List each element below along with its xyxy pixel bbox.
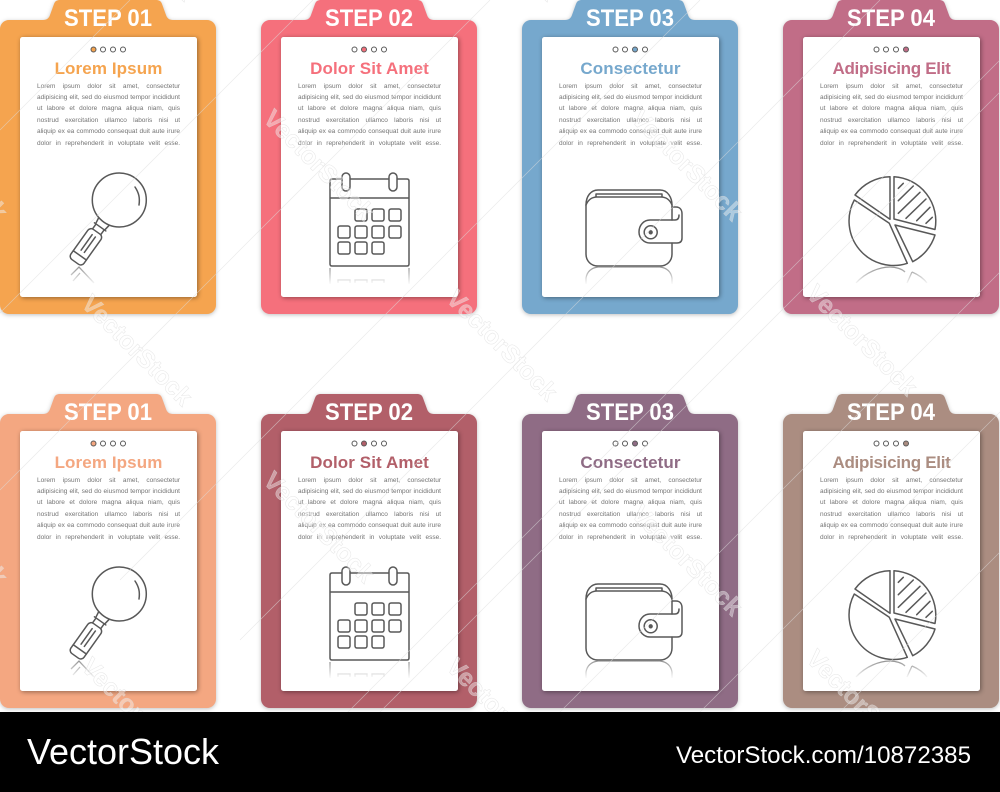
- card title: Dolor Sit Amet: [310, 453, 429, 472]
- card title: Adipisicing Elit: [832, 453, 950, 472]
- step label: STEP 02: [325, 399, 413, 426]
- body text: [820, 476, 963, 541]
- card title: Lorem Ipsum: [55, 453, 162, 472]
- step label: STEP 03: [586, 5, 674, 32]
- footer url: VectorStock.com/10872385: [676, 742, 971, 769]
- body text: aliquip ex ea commodo consequat duit aute irure: [559, 128, 702, 135]
- watermark overlay: VectorStock: [626, 499, 748, 621]
- body text: adipisicing elit, sed do eiusmod tempor incididunt: [37, 94, 180, 101]
- body text: aliquip ex ea commodo consequat duit aute irure: [37, 522, 180, 529]
- body text: ut labore et dolore magna aliqua niam, quis: [298, 105, 441, 112]
- body text: dolor in reprehenderit in voluptate velit esse.: [820, 140, 963, 147]
- body text: ut labore et dolore magna aliqua niam, quis: [820, 499, 963, 506]
- body text: [37, 476, 180, 541]
- card title: Adipisicing Elit: [832, 59, 950, 78]
- body text: dolor in reprehenderit in voluptate velit esse.: [559, 140, 702, 147]
- body text: Lorem ipsum dolor sit amet, consectetur: [820, 82, 963, 90]
- body text: ut labore et dolore magna aliqua niam, quis: [37, 499, 180, 506]
- card: step 02 red: [258, 0, 480, 318]
- body text: Lorem ipsum dolor sit amet, consectetur: [820, 476, 963, 484]
- body text: [820, 82, 963, 147]
- body text: nostrud exercitation ullamco laboris nisi ut: [820, 511, 963, 518]
- body text: [559, 476, 702, 541]
- body text: adipisicing elit, sed do eiusmod tempor incididunt: [820, 94, 963, 101]
- card: step 03 blue: [520, 0, 740, 318]
- body text: adipisicing elit, sed do eiusmod tempor incididunt: [37, 488, 180, 495]
- body text: ut labore et dolore magna aliqua niam, quis: [559, 499, 702, 506]
- body text: nostrud exercitation ullamco laboris nisi ut: [298, 117, 441, 124]
- card title: Lorem Ipsum: [55, 59, 162, 78]
- body text: aliquip ex ea commodo consequat duit aute irure: [298, 128, 441, 135]
- body text: dolor in reprehenderit in voluptate velit esse.: [37, 140, 180, 147]
- body text: ut labore et dolore magna aliqua niam, quis: [820, 105, 963, 112]
- step label: STEP 04: [847, 5, 935, 32]
- body text: dolor in reprehenderit in voluptate velit esse.: [298, 140, 441, 147]
- step label: STEP 03: [586, 399, 674, 426]
- body text: Lorem ipsum dolor sit amet, consectetur: [559, 82, 702, 90]
- card: step 01 orange: [0, 0, 218, 318]
- body text: nostrud exercitation ullamco laboris nisi ut: [559, 117, 702, 124]
- body text: Lorem ipsum dolor sit amet, consectetur: [37, 82, 180, 90]
- card: step 01 peach: [0, 392, 218, 712]
- body text: [298, 476, 441, 541]
- step label: STEP 01: [64, 399, 152, 426]
- body text: adipisicing elit, sed do eiusmod tempor incididunt: [559, 488, 702, 495]
- body text: Lorem ipsum dolor sit amet, consectetur: [298, 82, 441, 90]
- body text: aliquip ex ea commodo consequat duit aute irure: [820, 522, 963, 529]
- body text: aliquip ex ea commodo consequat duit aute irure: [298, 522, 441, 529]
- body text: [559, 82, 702, 147]
- watermark overlay: VectorStock: [258, 466, 380, 588]
- body text: adipisicing elit, sed do eiusmod tempor incididunt: [298, 488, 441, 495]
- body text: [37, 82, 180, 147]
- body text: nostrud exercitation ullamco laboris nisi ut: [37, 117, 180, 124]
- watermark overlay: VectorStock: [801, 279, 923, 401]
- body text: aliquip ex ea commodo consequat duit aute irure: [820, 128, 963, 135]
- step label: STEP 04: [847, 399, 935, 426]
- body text: Lorem ipsum dolor sit amet, consectetur: [37, 476, 180, 484]
- card: step 04 taupe: [780, 392, 1000, 712]
- card: step 02 rose: [258, 392, 480, 712]
- footer logo: VectorStock: [27, 731, 220, 772]
- body text: dolor in reprehenderit in voluptate velit esse.: [298, 534, 441, 541]
- card: step 03 plum: [520, 392, 740, 712]
- body text: ut labore et dolore magna aliqua niam, quis: [37, 105, 180, 112]
- step label: STEP 02: [325, 5, 413, 32]
- card title: Consectetur: [580, 59, 681, 78]
- card: step 04 mauve: [780, 0, 1000, 318]
- body text: dolor in reprehenderit in voluptate velit esse.: [820, 534, 963, 541]
- body text: adipisicing elit, sed do eiusmod tempor incididunt: [298, 94, 441, 101]
- body text: adipisicing elit, sed do eiusmod tempor incididunt: [820, 488, 963, 495]
- body text: ut labore et dolore magna aliqua niam, quis: [559, 105, 702, 112]
- body text: ut labore et dolore magna aliqua niam, quis: [298, 499, 441, 506]
- body text: adipisicing elit, sed do eiusmod tempor incididunt: [559, 94, 702, 101]
- body text: nostrud exercitation ullamco laboris nisi ut: [37, 511, 180, 518]
- body text: nostrud exercitation ullamco laboris nisi ut: [559, 511, 702, 518]
- footer bar: [0, 712, 1000, 792]
- watermark overlay: VectorStock: [441, 284, 563, 406]
- body text: Lorem ipsum dolor sit amet, consectetur: [298, 476, 441, 484]
- body text: nostrud exercitation ullamco laboris nisi ut: [298, 511, 441, 518]
- card title: Consectetur: [580, 453, 681, 472]
- body text: aliquip ex ea commodo consequat duit aute irure: [37, 128, 180, 135]
- card title: Dolor Sit Amet: [310, 59, 429, 78]
- body text: dolor in reprehenderit in voluptate velit esse.: [37, 534, 180, 541]
- watermark overlay: VectorStock: [76, 289, 198, 411]
- body text: aliquip ex ea commodo consequat duit aute irure: [559, 522, 702, 529]
- step label: STEP 01: [64, 5, 152, 32]
- watermark overlay: VectorStock: [626, 104, 748, 226]
- body text: Lorem ipsum dolor sit amet, consectetur: [559, 476, 702, 484]
- body text: [298, 82, 441, 147]
- watermark overlay: VectorStock: [258, 104, 380, 226]
- body text: nostrud exercitation ullamco laboris nisi ut: [820, 117, 963, 124]
- body text: dolor in reprehenderit in voluptate velit esse.: [559, 534, 702, 541]
